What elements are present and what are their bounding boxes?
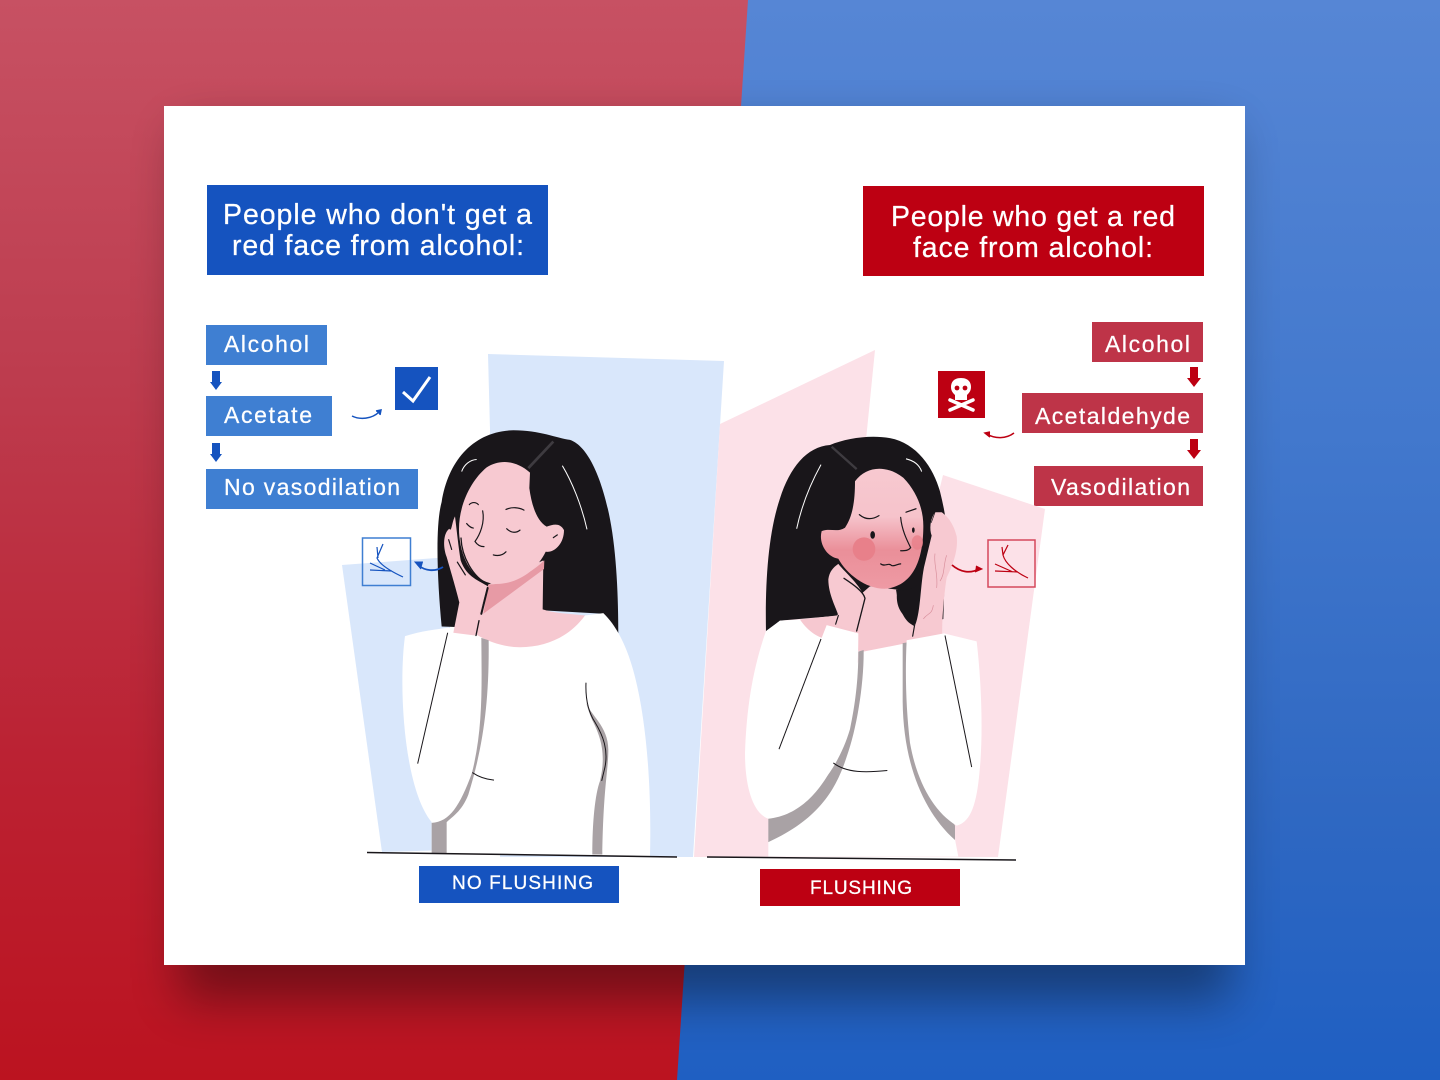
heading: people who get a red face	[863, 186, 1204, 276]
left hand	[828, 564, 865, 632]
label: flushing: FLUSHING	[810, 878, 912, 899]
background shape: pink	[694, 350, 1045, 857]
step: vasodilation	[1034, 466, 1203, 506]
sweater lines	[418, 633, 606, 781]
neck	[473, 560, 585, 647]
sweater shadows	[432, 638, 608, 855]
ground line: right	[707, 857, 1016, 860]
heading: people who get a red face: People who get a red	[891, 201, 1175, 233]
neck shadow	[483, 560, 544, 614]
hair highlights	[462, 442, 587, 529]
step: acetate: Acetate	[224, 402, 312, 428]
heading: people who don't get a red face: People who don't get a	[223, 199, 532, 231]
arrow: alcohol to acetate	[210, 371, 222, 390]
illustration: calm woman	[402, 430, 650, 857]
flushed face	[821, 469, 923, 589]
arrow: acetate to check	[352, 410, 381, 418]
sweater	[402, 613, 650, 857]
arrow: alcohol to acetaldehyde	[1187, 367, 1201, 387]
eyes	[870, 527, 915, 539]
face	[459, 462, 564, 584]
heading: people who get a red face: face from alcohol:	[913, 232, 1153, 264]
illustration: flushed woman	[745, 437, 982, 857]
hair behind neck	[896, 581, 922, 626]
label: no flushing	[419, 866, 619, 903]
step: acetate	[206, 396, 332, 436]
sweater lines	[779, 635, 972, 772]
heading: people who don't get a red face: red face from alcohol:	[232, 230, 524, 262]
sweater	[768, 643, 958, 857]
panel: no-flushing metabolic pathway	[206, 325, 418, 509]
hand veins	[923, 554, 947, 619]
step: alcohol	[1092, 322, 1203, 362]
facial features	[449, 503, 557, 635]
facial features	[836, 509, 935, 636]
icon: check mark	[395, 367, 438, 410]
right hand	[914, 512, 957, 635]
sweater shadows	[768, 642, 955, 842]
label: flushing	[760, 869, 960, 906]
step: alcohol: Alcohol	[1105, 331, 1190, 357]
hand	[444, 516, 488, 635]
ground line: left	[367, 852, 677, 857]
icon: blood vessel, blue	[362, 538, 410, 586]
arrow: acetaldehyde to skull	[985, 432, 1014, 438]
step: acetaldehyde: Acetaldehyde	[1035, 403, 1190, 429]
cheeks	[853, 535, 923, 561]
hair highlights	[797, 447, 922, 529]
arrow: face to red vessel	[952, 565, 982, 572]
heading: people who don't get a red face	[207, 185, 548, 275]
icon: blood vessel, red	[988, 540, 1035, 587]
left sleeve	[745, 620, 858, 819]
hair	[437, 430, 618, 634]
step: alcohol	[206, 325, 327, 365]
white card panel	[164, 106, 1245, 965]
panel: flushing metabolic pathway	[1022, 322, 1203, 506]
hair	[766, 437, 946, 632]
step: no vasodilation	[206, 469, 418, 509]
step: acetaldehyde	[1022, 393, 1203, 433]
arrow: acetate to no vasodilation	[210, 443, 222, 462]
step: no vasodilation: No vasodilation	[224, 474, 400, 500]
right sleeve	[906, 633, 982, 826]
card shadow	[180, 130, 1230, 1000]
step: alcohol: Alcohol	[224, 331, 309, 357]
arrow: face to blue vessel	[415, 562, 443, 570]
arrow: acetaldehyde to vasodilation	[1187, 439, 1201, 459]
neck and chest	[800, 586, 942, 652]
background shape: blue	[342, 354, 724, 857]
icon: skull and crossbones	[938, 371, 985, 418]
label: no flushing: NO FLUSHING	[452, 873, 593, 894]
step: vasodilation: Vasodilation	[1051, 474, 1190, 500]
